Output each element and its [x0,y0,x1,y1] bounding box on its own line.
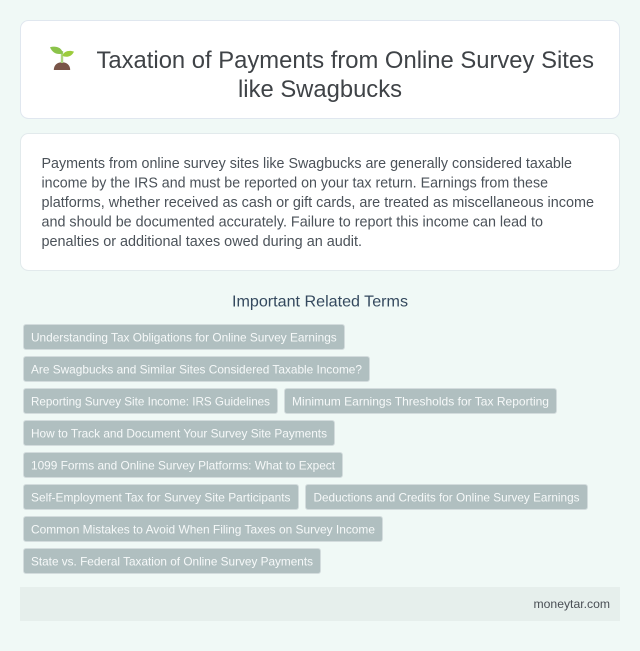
tag [24,548,320,574]
summary text: Payments from online survey sites like Swagbucks are generally considered taxable [42,156,572,172]
tag [24,324,344,350]
title [96,47,594,103]
tag [24,356,370,382]
summary text: platforms, whether received as cash or gift cards, are treated as miscellaneous income [42,195,594,211]
tag [306,484,588,510]
tag: How to Track and Document Your Survey Site Payments [31,426,327,440]
tag: State vs. Federal Taxation of Online Survey Payments [31,554,313,568]
summary text: penalties or additional taxes owed during an audit. [42,234,362,250]
tag [24,484,298,510]
tag [24,388,278,414]
tag: Are Swagbucks and Similar Sites Considered Taxable Income? [31,362,362,376]
icon: seedling [50,47,74,70]
tag [24,452,342,478]
tag [24,516,382,542]
heading: related terms: Important Related Terms [232,294,408,310]
footer: moneytar.com [534,597,610,611]
title: like Swagbucks [238,76,402,103]
summary text: income by the IRS and must be reported on your tax return. Earnings from these [42,176,548,192]
tag: Self-Employment Tax for Survey Site Participants [31,490,290,504]
tag: Understanding Tax Obligations for Online Survey Earnings [31,330,337,344]
summary text: and should be documented accurately. Failure to report this income can lead to [42,214,543,230]
tag: Deductions and Credits for Online Survey Earnings [314,490,580,504]
tag: 1099 Forms and Online Survey Platforms: What to Expect [31,458,336,472]
panel: summary card [20,134,620,270]
panel: title card [20,20,620,118]
tag: Reporting Survey Site Income: IRS Guidelines [31,394,270,408]
tag [24,420,334,446]
title: Taxation of Payments from Online Survey Sites [96,47,594,74]
tag [284,388,556,414]
footer [20,587,620,621]
panel: related term tags [24,324,588,574]
summary text [42,156,594,250]
tag: Minimum Earnings Thresholds for Tax Reporting [292,394,549,408]
tag: Common Mistakes to Avoid When Filing Taxes on Survey Income [31,522,375,536]
